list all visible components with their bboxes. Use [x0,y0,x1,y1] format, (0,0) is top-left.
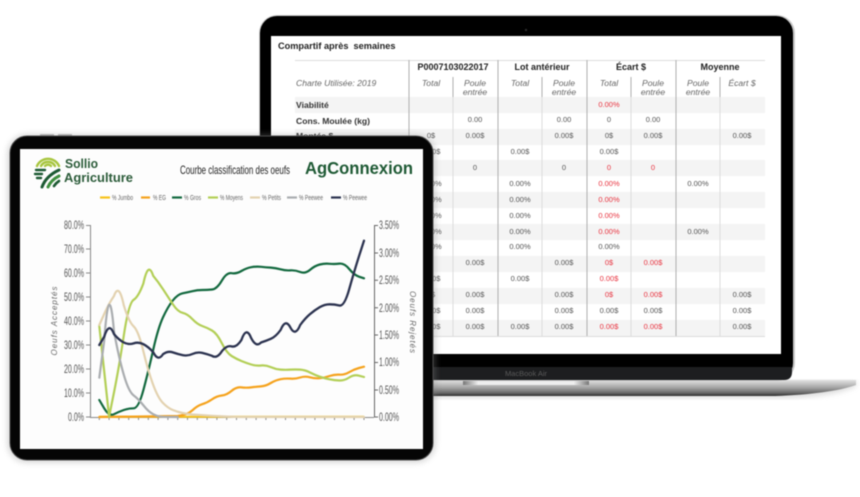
left axis: 10.0% [64,386,84,400]
table values: 0.00 [468,115,482,124]
line: % Petits [99,291,364,417]
right axis: 2.00% [379,301,399,315]
column headers: Lot antérieur [514,62,570,72]
table values: 0.00$ [555,306,574,315]
column headers: Total [600,78,619,88]
left axis: 50.0% [64,290,84,304]
legend: % Petits [262,193,281,202]
laptop screen [271,36,781,354]
right axis: Oeufs Rejetés [408,291,417,353]
column headers: Poule [464,78,486,88]
line: % Peewee grey [99,305,178,417]
right axis: 3.50% [379,218,399,232]
table values: 0.00$ [733,306,752,315]
table values: 0$ [427,290,436,299]
table values: 0.00$ [466,290,485,299]
table values: 0$ [605,131,614,140]
table values: 0$ [605,290,614,299]
left axis: 40.0% [64,314,84,328]
table values: 0.00 [557,115,571,124]
left axis: 60.0% [64,266,84,280]
column headers: Écart $ [728,78,756,88]
table values: 0.00$ [644,131,663,140]
table values: 0.00% [598,195,620,204]
table values: 0.00$ [555,322,574,331]
legend: % EG [153,193,166,202]
table heading: Compartif après semaines [278,41,395,51]
logo: Sollio Agriculture [35,157,133,187]
row labels [296,100,370,141]
left axis: 0.0% [68,410,84,424]
column headers: entrée [552,87,576,97]
row labels: Viabilité [296,100,329,110]
row stripes [295,97,765,336]
logo: Sollio Agriculture: Agriculture [64,171,133,185]
table values: 0.00% [598,227,620,236]
table values: 0.00$ [600,322,619,331]
legend: % Jumbo [112,193,133,202]
table values: 0.00$ [511,322,530,331]
table values [420,100,752,331]
table values: 0.00$ [466,322,485,331]
table values: 0.00$ [644,322,663,331]
right axis: 3.00% [379,246,399,260]
column headers: Poule [642,78,664,88]
table values: 0.00$ [555,131,574,140]
table values: 0.00$ [422,306,441,315]
table values: 0.00$ [600,274,619,283]
table values: 0.00$ [422,147,441,156]
column headers: entrée [641,87,665,97]
column headers: entrée [463,87,487,97]
table values: 0.00% [598,211,620,220]
tablet [7,134,436,463]
table values: 0.00$ [644,290,663,299]
legend: % Peewee [343,193,367,202]
legend: % Moyens [220,193,243,202]
chart: egg classification curves [50,218,417,424]
table values: 0.00$ [555,290,574,299]
right axis [374,218,417,424]
table values: 0.00$ [644,258,663,267]
table values: 0.00% [687,227,709,236]
table values: 0.00% [509,195,531,204]
table values: 0.00% [509,211,531,220]
table values: 0.00% [687,179,709,188]
table values: 0.00% [420,179,442,188]
table values: 0$ [605,258,614,267]
table values: 0.00$ [733,131,752,140]
table values: 0.00% [509,179,531,188]
table values: 0.00$ [733,290,752,299]
right axis: 1.50% [379,328,399,342]
table values: 0.00$ [555,258,574,267]
row labels: Cons. Moulée (kg) [296,116,370,126]
row labels: Montée $ [296,131,333,141]
table values: 0.00% [598,179,620,188]
laptop base [200,380,856,398]
table values: 0.00% [509,242,531,251]
icon: Sollio mark [35,159,59,187]
column headers: P0007103022017 [417,62,489,72]
right axis: 0.00% [379,410,399,424]
right axis: 2.50% [379,273,399,287]
table values: 0 [607,163,611,172]
column headers: entrée [686,87,710,97]
left axis: 80.0% [64,218,84,232]
table values: 0.00% [509,227,531,236]
x axis [90,417,374,420]
table values: 0.00$ [466,306,485,315]
right axis: 0.50% [379,383,399,397]
table values: 0.00$ [422,322,441,331]
table values: 0.00$ [511,147,530,156]
left axis: 20.0% [64,362,84,376]
table: compartif [295,60,765,336]
chart title: Courbe classification des oeufs [180,163,290,177]
legend: % Gros [184,193,201,202]
table values: 0.00$ [422,274,441,283]
left axis: 30.0% [64,338,84,352]
column headers: Poule [553,78,575,88]
table values: 0.00% [598,242,620,251]
line: % Peewee navy [99,241,364,358]
table values: 0.00% [598,100,620,109]
table values: 0.00$ [511,274,530,283]
line: % Moyens [99,270,364,417]
column headers: Écart $ [616,62,646,72]
table values: 0 [607,115,611,124]
table values: 0.00$ [466,258,485,267]
left axis: 70.0% [64,242,84,256]
tablet body [7,134,436,463]
logo: Sollio Agriculture: Sollio [65,157,98,171]
line: % Gros [99,264,364,415]
table values: 0.00% [420,211,442,220]
table values: 0.00$ [600,306,619,315]
table values: 0 [473,163,477,172]
table values: 0.00 [646,115,660,124]
column headers [296,62,756,97]
left axis: Oeufs Acceptés [50,286,59,356]
column headers: Total [511,78,530,88]
table values: 0.00% [420,242,442,251]
table values: 0.00% [420,195,442,204]
laptop [200,15,856,398]
table values: 0.00$ [466,131,485,140]
legend [100,193,367,202]
table values: 0 [651,163,655,172]
line: % EG [99,367,364,417]
column headers: Total [422,78,441,88]
table values: 0.00% [420,227,442,236]
legend: % Peewee [299,193,323,202]
table values: 0.00$ [733,322,752,331]
column headers: Moyenne [700,62,740,72]
table values: 0.00$ [644,306,663,315]
line: % Jumbo [99,416,364,418]
left axis [50,218,90,424]
table values: 0$ [427,131,436,140]
table values: 0.00$ [600,147,619,156]
column headers: Poule [687,78,709,88]
logo: AgConnexion: AgConnexion [305,158,413,178]
table values: 0 [562,163,566,172]
laptop lid [259,15,795,381]
MacBook Air label: MacBook Air [505,369,548,378]
right axis: 1.00% [379,355,399,369]
column headers: Charte Utilisée: 2019 [296,78,376,88]
